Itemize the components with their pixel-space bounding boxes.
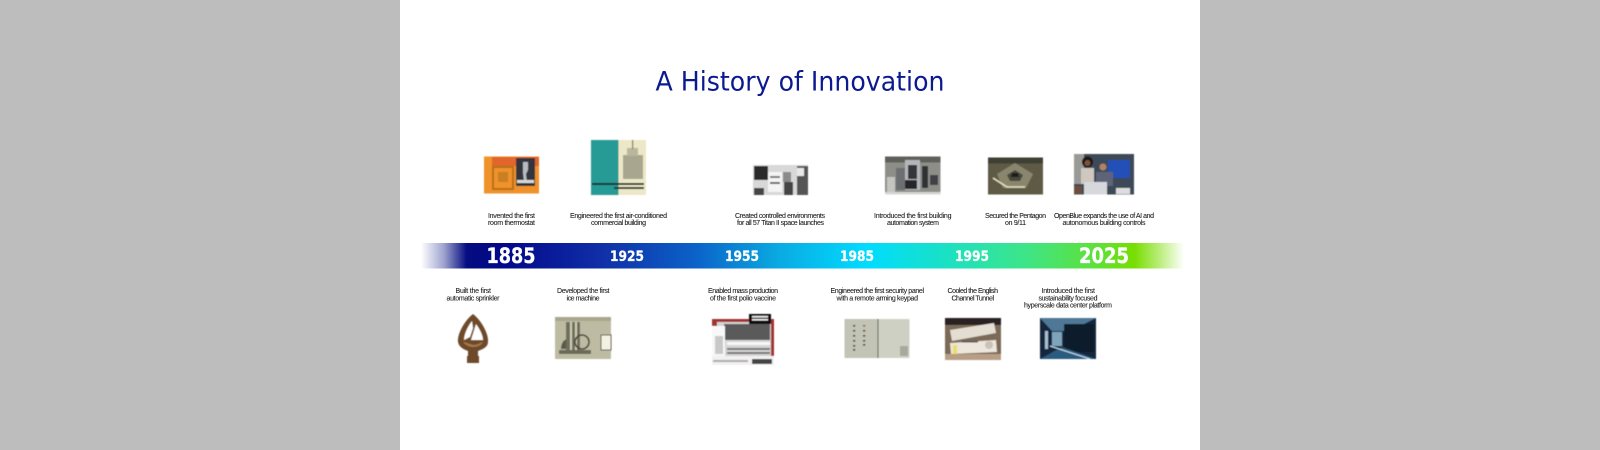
caption: data center: hyperscale data center platform bbox=[1024, 302, 1112, 310]
caption: Channel Tunnel: Channel Tunnel bbox=[952, 296, 994, 302]
year 1995: 1995 bbox=[955, 249, 989, 265]
caption: security panel: with a remote arming keypad bbox=[836, 296, 918, 302]
caption: polio vaccine bbox=[708, 288, 778, 302]
caption: Channel Tunnel bbox=[948, 288, 998, 302]
caption: automation system: Introduced the first building bbox=[874, 213, 952, 220]
caption: OpenBlue: OpenBlue expands the use of AI and bbox=[1054, 213, 1154, 220]
caption: data center bbox=[1024, 288, 1112, 310]
caption: automation system: automation system bbox=[887, 220, 939, 227]
image: room thermostat advertisement bbox=[484, 156, 539, 194]
caption: Pentagon: Secured the Pentagon bbox=[985, 213, 1046, 220]
image: Titan II control room photo bbox=[753, 165, 808, 195]
image: aerial view of the Pentagon bbox=[988, 158, 1043, 194]
caption: security panel: Engineered the first security panel bbox=[830, 288, 924, 295]
caption: air-conditioned building: commercial building bbox=[591, 220, 646, 227]
year 1955: 1955 bbox=[725, 249, 759, 265]
caption: Channel Tunnel: Cooled the English bbox=[948, 288, 998, 295]
year 1985: 1985 bbox=[840, 249, 874, 265]
year 2025: 2025 bbox=[1079, 244, 1129, 268]
caption: Pentagon bbox=[985, 213, 1046, 227]
caption: OpenBlue: autonomous building controls bbox=[1062, 220, 1146, 227]
year 1885: 1885 bbox=[486, 244, 536, 268]
image: air-conditioned building brochure bbox=[591, 140, 646, 195]
caption: Titan II bbox=[735, 213, 826, 227]
image: automatic sprinkler bbox=[458, 314, 488, 363]
caption: security panel bbox=[830, 288, 924, 302]
caption: polio vaccine: of the first polio vaccine bbox=[710, 296, 776, 302]
white page panel bbox=[400, 0, 1200, 450]
image: OpenBlue team with laptop bbox=[1074, 154, 1134, 194]
caption: Titan II: Created controlled environments bbox=[735, 213, 826, 220]
caption: room thermostat bbox=[488, 213, 535, 227]
title: A History of Innovation bbox=[656, 66, 944, 98]
caption: OpenBlue bbox=[1054, 213, 1154, 227]
caption: automation system bbox=[874, 213, 952, 227]
caption: ice machine: Developed the first bbox=[557, 288, 610, 295]
caption: sprinkler: automatic sprinkler bbox=[446, 296, 500, 302]
image: ice machine engraving bbox=[555, 317, 611, 359]
year 1925: 1925 bbox=[610, 249, 644, 265]
caption: polio vaccine: Enabled mass production bbox=[708, 288, 778, 295]
caption: Titan II: for all 57 Titan II space launches bbox=[737, 220, 824, 227]
caption: Pentagon: on 9/11 bbox=[1005, 220, 1026, 227]
caption: ice machine: ice machine bbox=[566, 296, 600, 302]
caption: data center: sustainability focused bbox=[1038, 296, 1098, 302]
caption: air-conditioned building: Engineered the first air-conditioned bbox=[570, 213, 667, 220]
image: building automation system products bbox=[885, 156, 940, 194]
caption: sprinkler: Built the first bbox=[456, 288, 491, 295]
caption: room thermostat: room thermostat bbox=[488, 220, 535, 227]
caption: ice machine bbox=[557, 288, 610, 302]
image: polio vaccine advertisement bbox=[712, 314, 774, 365]
image: security panel keypad bbox=[844, 319, 910, 358]
caption: sprinkler bbox=[446, 288, 500, 302]
caption: room thermostat: Invented the first bbox=[488, 213, 535, 220]
caption: data center: Introduced the first bbox=[1042, 288, 1095, 295]
image: Channel Tunnel chillers bbox=[945, 318, 1001, 360]
image: hyperscale data center corridor bbox=[1040, 318, 1096, 359]
timeline gradient bar bbox=[421, 243, 1184, 268]
caption: air-conditioned building bbox=[570, 213, 667, 227]
